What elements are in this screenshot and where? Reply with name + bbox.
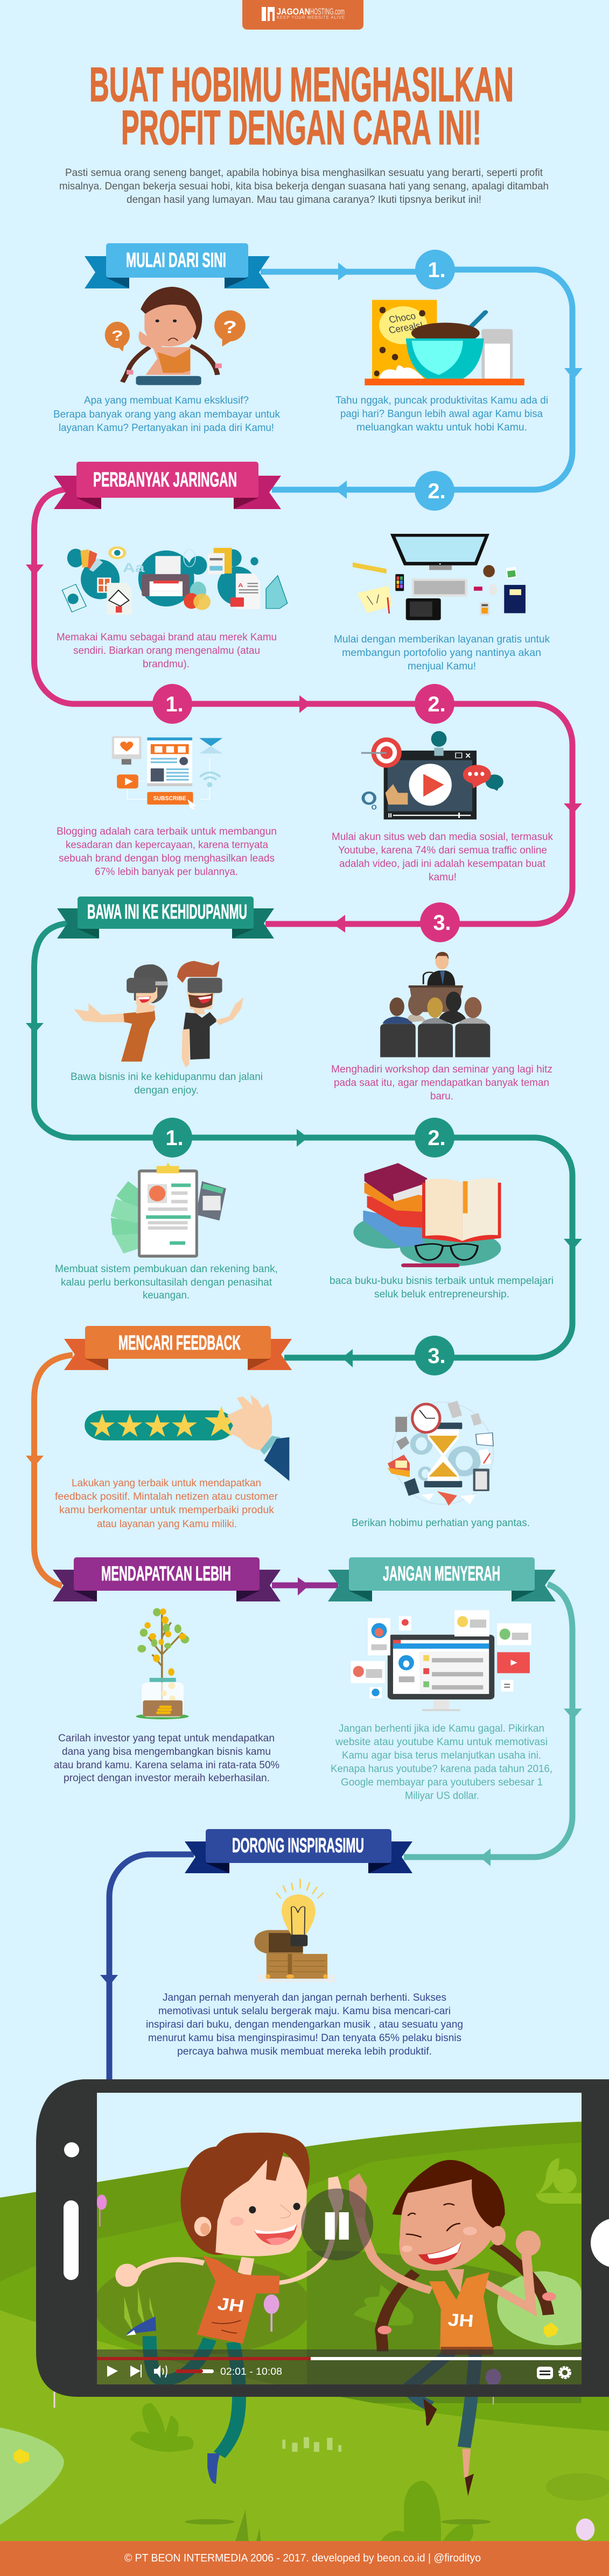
ribbon: Mencari feedback [64,1326,292,1370]
icon: money tree [136,1608,189,1719]
text block: Jangan pernah: inspirasi dari buku, dengan mendengarkan musik , atau sesuatu yang [146,2019,463,2030]
text block: Blogging: sebuah brand dengan blog menghasilkan leads [59,853,275,864]
text block: Apa yang membuat: Apa yang membuat Kamu eksklusif? [84,395,249,406]
text block: Mulai akun: Mulai akun situs web dan media sosial, termasuk [332,831,553,843]
text block: Lakukan: Lakukan yang terbaik untuk mendapatkan [72,1478,261,1489]
arrow: navy [100,1975,118,1986]
connector path: blue [261,270,572,490]
text block: Jangan pernah: memotivasi untuk selalu bergerak maju. Kamu bisa mencari-cari [158,2006,451,2017]
icon: blogging [112,736,222,809]
icon: time management [388,1401,493,1506]
illustration: jumping boy: JH [216,2294,246,2316]
number badges: 3. [433,911,451,935]
text block: Memakai Kamu [57,632,277,670]
icon: finance clipboard [111,1162,226,1258]
text block: Jangan berhenti: Kamu agar bisa terus melanjutkan usaha ini. [342,1750,541,1761]
footer: © PT BEON INTERMEDIA 2006 - 2017. developed by beon.co.id | @firodityo [124,2552,481,2564]
icon: branding collage: Aa [123,561,145,575]
icon: stack of books [353,1163,501,1267]
text block: Jangan berhenti: Kenapa harus youtube? karena pada tahun 2016, [331,1763,552,1775]
icon: blogging: SUBSCRIBE [153,795,186,802]
icon: cereal breakfast: Choco [388,310,417,325]
intro text: dengan hasil yang lumayan. Mau tau gimana caranya? Ikuti tipsnya berikut ini! [127,194,481,206]
ribbon: Mendapatkan lebih [53,1557,281,1601]
text block: Menghadiri: pada saat itu, agar mendapatkan banyak teman [334,1077,549,1089]
text block: Blogging: kesadaran dan kepercayaan, karena ternyata [66,839,268,851]
phone home button [591,2218,609,2268]
icon: lightbulb in chest [254,1879,336,1982]
text block: Tahu nggak [335,395,548,433]
scene: green hills [0,2121,609,2541]
icon: star rating [85,1395,289,1481]
ribbon: Perbanyak jaringan: PERBANYAK JARINGAN [93,469,237,491]
text block: Memakai Kamu: sendiri. Biarkan orang mengenalmu (atau [73,645,260,657]
text block: Bawa bisnis: dengan enjoy. [134,1085,199,1096]
text block: baca buku [330,1275,554,1300]
arrows: green [26,1023,582,1367]
text block: Jangan berhenti: Miliyar US dollar. [405,1790,479,1802]
icon: VR friends [74,961,243,1068]
time label: 02:01 - 10:08 [220,2366,282,2377]
intro text: misalnya. Dengan bekerja sesuai hobi, kita bisa bekerja dengan suasana hati yang senang, apalagi ditambah [59,181,549,192]
icon: speaker and audience [380,952,490,1057]
text block: Membuat sistem: kalau perlu berkonsultasilah dengan penasihat [61,1277,272,1288]
number badges: 1. [165,1126,184,1150]
number badges: 1. [165,693,184,716]
text block: Jangan pernah: percaya bahwa musik membuat mereka lebih produktif. [177,2046,432,2057]
text block: Carilah investor: project dengan investor meraih keberhasilan. [64,1773,270,1784]
text block: Lakukan: atau layanan yang Kamu miliki. [97,1519,237,1530]
icon: branding collage [62,546,288,615]
ribbon: Jangan menyerah [328,1557,556,1601]
text block: Menghadiri: Menghadiri workshop dan seminar yang lagi hitz [331,1064,552,1075]
icon: thinking girl [105,287,246,385]
phone frame [36,2079,609,2397]
text block: Carilah investor: dana yang bisa mengembangkan bisnis kamu [62,1746,271,1758]
ribbon: Mulai dari sini: MULAI DARI SINI [126,249,226,272]
text block: Menghadiri: baru. [430,1091,453,1102]
footer [0,2541,609,2576]
text block: Membuat sistem: keuangan. [143,1290,190,1301]
illustration: jumping boy [115,2133,344,2484]
text block: Bawa bisnis: Bawa bisnis ini ke kehidupanmu dan jalani [71,1071,263,1083]
logo tab [242,0,363,30]
text block: Berikan hobimu: Berikan hobimu perhatian yang pantas. [352,1518,530,1529]
icon: cereal breakfast [365,300,524,385]
icon: cereal breakfast: Cereals! [387,320,424,336]
text block: Jangan berhenti: Jangan berhenti jika ide Kamu gagal. Pikirkan [339,1723,544,1734]
text block: Jangan pernah: menurut kamu bisa menginspirasimu! Dan tenyata 65% pelaku bisnis [148,2032,461,2044]
logo tab: KEEP YOUR WEBSITE ALIVE [277,15,345,20]
icon: video marketing [361,731,503,820]
intro text: Pasti semua orang seneng banget, apabila hobinya bisa menghasilkan sesuatu yang berarti, seperti profit [65,167,543,179]
ribbon: Perbanyak jaringan [54,462,281,509]
text block: Lakukan [55,1478,278,1530]
text block: Mulai akun [332,831,553,883]
text block: Jangan pernah [146,1992,463,2057]
text block: baca buku: baca buku-buku bisnis terbaik untuk mempelajari [330,1275,554,1287]
text block: Tahu nggak: pagi hari? Bangun lebih awal agar Kamu bisa [340,408,543,420]
title [89,58,514,155]
text block: Mulai dengan: menjual Kamu! [408,661,476,672]
logo tab: HOSTING.com [310,6,345,17]
connector path: green [34,923,572,1358]
text block: Apa yang membuat [53,395,280,434]
text block: Carilah investor: Carilah investor yang tepat untuk mendapatkan [58,1733,275,1744]
icon: branding collage: A [238,583,243,589]
text block: Mulai dengan: Mulai dengan memberikan layanan gratis untuk [334,634,550,645]
ribbon: Mendapatkan lebih: MENDAPATKAN LEBIH [101,1563,231,1585]
icon: thinking girl: ? [223,317,237,337]
text block: Membuat sistem [55,1264,278,1301]
ribbon: Dorong inspirasimu [185,1829,412,1873]
text block: Lakukan: kamu berkomentar untuk memperbaiki produk [59,1505,275,1516]
connector path: navy [109,1854,194,2083]
phone camera and speaker [64,2142,79,2280]
number badges: 2. [428,693,446,716]
connector path: purple [272,1577,338,1596]
icon: designer desk [353,534,526,620]
number badges: 1. [428,258,446,282]
ribbon: Dorong inspirasimu: DORONG INSPIRASIMU [232,1834,364,1857]
ribbon: Jangan menyerah: JANGAN MENYERAH [383,1563,500,1585]
text block: Apa yang membuat: Berapa banyak orang yang akan membayar untuk [53,409,280,420]
text block: Apa yang membuat: layanan Kamu? Pertanyakan ini pada diri Kamu! [59,422,274,434]
pause button [301,2189,373,2260]
illustration: jumping girl: JH [447,2310,474,2331]
icon: volume [154,2365,167,2378]
text block: Memakai Kamu: Memakai Kamu sebagai brand atau merek Kamu [57,632,277,643]
icon: thinking girl: ? [111,328,123,344]
connector path: pink [34,489,572,924]
ribbon: Bawa ini ke kehidupanmu [57,897,274,938]
text block: Mulai akun: kamu! [429,872,457,883]
connector path: orange [34,1355,73,1586]
icon: captions [537,2367,553,2379]
number badges: 3. [428,1344,446,1368]
text block: Carilah investor [54,1733,279,1784]
number badges: 2. [428,1126,446,1150]
number badges [152,250,460,1375]
illustration: jumping girl [349,2160,556,2496]
logo tab: JAGOAN [277,6,310,17]
text block: Carilah investor: atau brand kamu. Karena selama ini rata-rata 50% [54,1760,279,1771]
intro text [59,167,549,206]
text block: Blogging: Blogging adalah cara terbaik untuk membangun [57,826,277,837]
text block: Blogging: 67% lebih banyak per bulannya. [95,866,238,878]
text block: Bawa bisnis [71,1071,263,1096]
icon: play [107,2366,118,2377]
number badges: 2. [428,479,446,503]
text block: Mulai akun: adalah video, jadi ini adalah kesempatan buat [339,858,546,870]
text block: Jangan berhenti [331,1723,552,1802]
text block: Menghadiri [331,1064,552,1102]
text block: baca buku: seluk beluk entrepreneurship. [374,1289,509,1300]
icon: social media tablet [351,1610,531,1711]
ribbon: Mulai dari sini [85,243,270,288]
connector path: sea green [404,1584,572,1857]
icon: next [130,2365,142,2377]
arrow: orange [26,1456,44,1466]
text block: Lakukan: feedback positif. Mintalah netizen atau customer [55,1491,278,1502]
text block: Mulai dengan: membangun portofolio yang nantinya akan [342,647,541,659]
text block: Memakai Kamu: brandmu). [143,659,190,670]
text block: Blogging [57,826,277,878]
text block: Membuat sistem: Membuat sistem pembukuan dan rekening bank, [55,1264,278,1275]
text block: Jangan berhenti: Google membayar para youtubers sebesar 1 [341,1777,543,1788]
arrows: pink [26,564,582,933]
text block: Mulai akun: Youtube, karena 74% dari semua traffic online [338,845,547,856]
volume slider [176,2369,214,2373]
icon: settings [560,2368,570,2377]
text block: Tahu nggak: meluangkan waktu untuk hobi Kamu. [356,422,527,433]
text block: Mulai dengan [334,634,550,672]
arrows: blue [335,263,583,499]
video control bar [97,2349,582,2384]
text block: Jangan berhenti: website atau youtube Kamu untuk memotivasi [335,1737,548,1748]
arrows: sea green [480,1709,582,1866]
text block: Jangan pernah: Jangan pernah menyerah dan jangan pernah berhenti. Sukses [163,1992,446,2003]
ribbon: Mencari feedback: MENCARI FEEDBACK [118,1332,241,1354]
text block: Tahu nggak: Tahu nggak, puncak produktivitas Kamu ada di [335,395,548,406]
ribbon: Bawa ini ke kehidupanmu: BAWA INI KE KEHIDUPANMU [87,901,247,923]
